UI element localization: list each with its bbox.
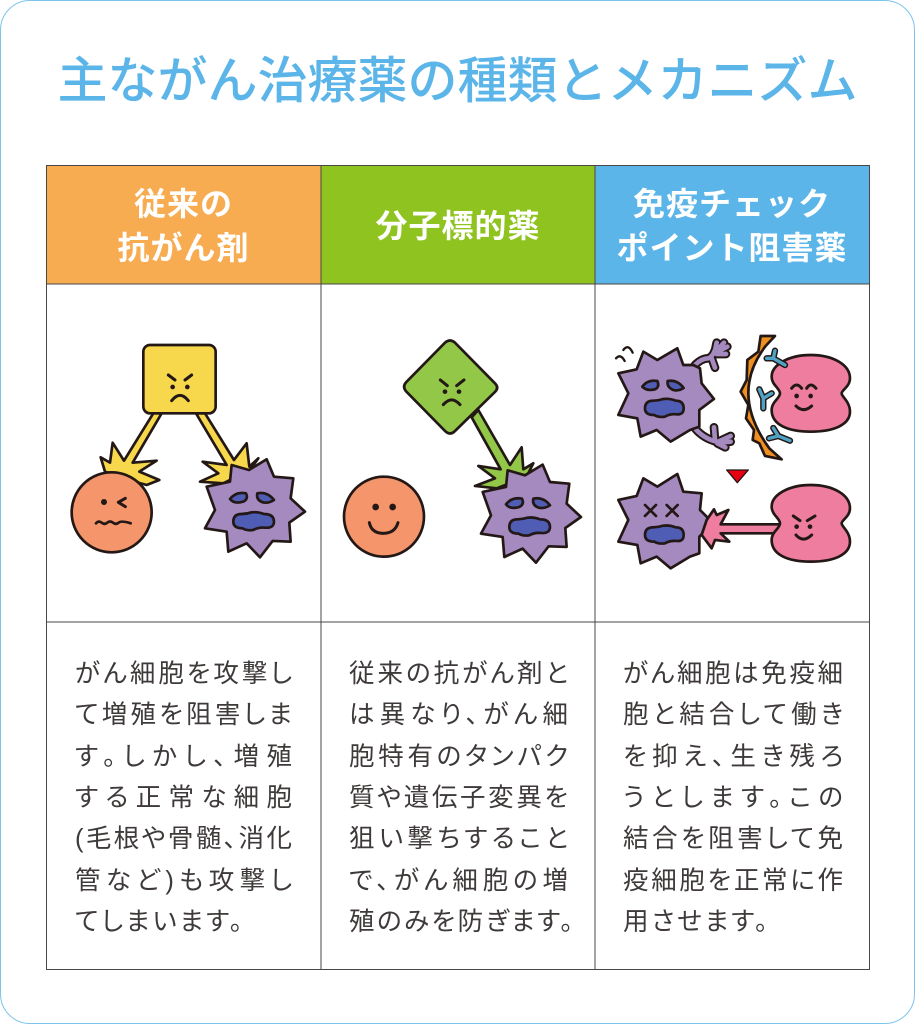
text block: checkpoint inhibitors: 疫細胞を正常に作	[623, 867, 843, 895]
text block: conventional drugs	[75, 660, 292, 936]
text block: checkpoint inhibitors: を抑え、生き残ろ	[623, 743, 843, 771]
burst right	[196, 413, 258, 483]
red triangle	[727, 470, 748, 483]
text block: checkpoint inhibitors: 用させます。	[623, 908, 771, 936]
text block: conventional drugs: がん細胞を攻撃し	[75, 660, 292, 688]
green diamond drug	[404, 340, 497, 433]
text block: targeted drugs: で、がん細胞の増	[349, 867, 568, 895]
header: immune checkpoint inhibitors: ポイント阻害薬	[616, 230, 848, 266]
text block: conventional drugs: (毛根や骨髄、消化	[75, 825, 292, 853]
normal cell	[72, 472, 152, 552]
header: conventional anticancer drugs: 従来の	[134, 186, 233, 222]
header: molecular targeted drugs: 分子標的薬	[375, 208, 540, 244]
cancer cell upper	[618, 348, 714, 442]
text block: checkpoint inhibitors: 結合を阻害して免	[623, 825, 843, 853]
header: conventional anticancer drugs	[46, 165, 321, 284]
yellow square drug	[143, 345, 216, 413]
text block: conventional drugs: てしまいます。	[75, 908, 245, 936]
sweat marks	[616, 347, 633, 361]
header: immune checkpoint inhibitors	[595, 165, 869, 284]
text block: checkpoint inhibitors: 胞と結合して働き	[623, 701, 843, 729]
burst left	[101, 413, 162, 485]
text block: checkpoint inhibitors: がん細胞は免疫細	[623, 660, 843, 688]
smiling normal cell	[344, 477, 424, 557]
pink rod and burst	[702, 509, 780, 548]
immune cell upper	[772, 355, 850, 432]
immune cell lower	[772, 485, 850, 562]
header: conventional anticancer drugs: 抗がん剤	[117, 230, 250, 266]
antibodies	[759, 351, 790, 441]
text block: targeted drugs: 従来の抗がん剤と	[349, 660, 568, 688]
text block: targeted drugs: 殖のみを防ぎます。	[349, 908, 573, 936]
text block: targeted drugs: 狙い撃ちすること	[349, 825, 568, 853]
cancer arms	[695, 343, 731, 447]
cancer cell lower	[618, 474, 713, 568]
text block: targeted drugs: 胞特有のタンパク	[349, 743, 568, 771]
cancer cell	[481, 465, 581, 563]
text block: targeted drugs: は異なり、がん細	[349, 701, 568, 729]
membrane	[741, 336, 782, 459]
green rod and burst	[472, 410, 533, 488]
text block: conventional drugs: 管など)も攻撃し	[75, 867, 292, 895]
text block: checkpoint inhibitors: うとします。この	[623, 784, 843, 812]
cancer cell	[205, 459, 305, 557]
text block: targeted drugs: 質や遺伝子変異を	[349, 784, 568, 812]
text block: conventional drugs: て増殖を阻害しま	[75, 701, 292, 729]
text block: targeted drugs	[349, 660, 573, 936]
text block: conventional drugs: する正常な細胞	[75, 784, 292, 812]
header: molecular targeted drugs	[321, 165, 595, 284]
header: immune checkpoint inhibitors: 免疫チェック	[633, 186, 831, 222]
text block: conventional drugs: す。しかし、増殖	[75, 743, 292, 771]
text block: checkpoint inhibitors	[623, 660, 843, 936]
title: 主ながん治療薬の種類とメカニズム	[58, 53, 858, 109]
